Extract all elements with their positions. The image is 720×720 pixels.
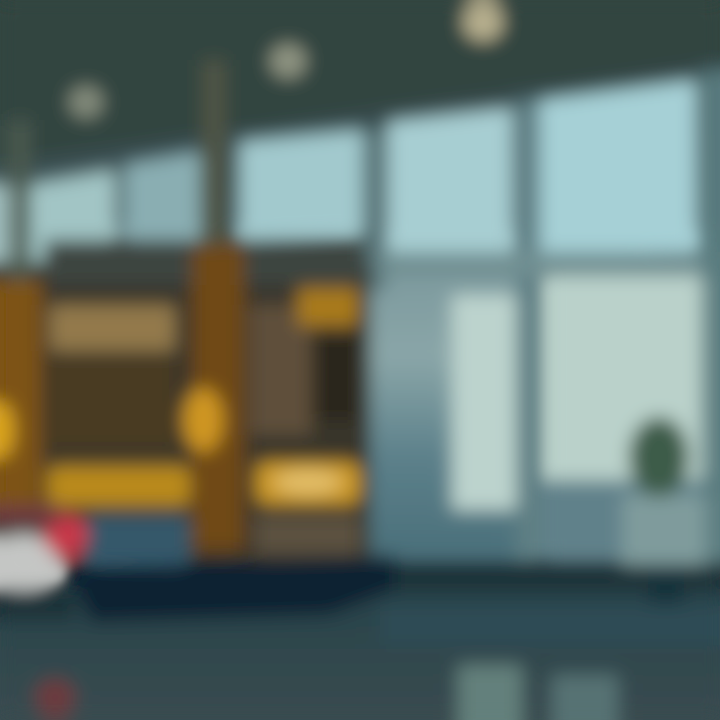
car <box>0 505 190 620</box>
floor <box>0 590 720 720</box>
dark counter band <box>70 555 720 622</box>
windows upper <box>0 80 696 265</box>
shop columns and signs <box>0 60 360 550</box>
windows lower <box>370 270 720 560</box>
ceiling <box>0 0 720 230</box>
plant <box>622 417 706 604</box>
mullions <box>362 70 720 570</box>
shop structure <box>0 240 370 560</box>
ceiling lights <box>69 3 503 118</box>
